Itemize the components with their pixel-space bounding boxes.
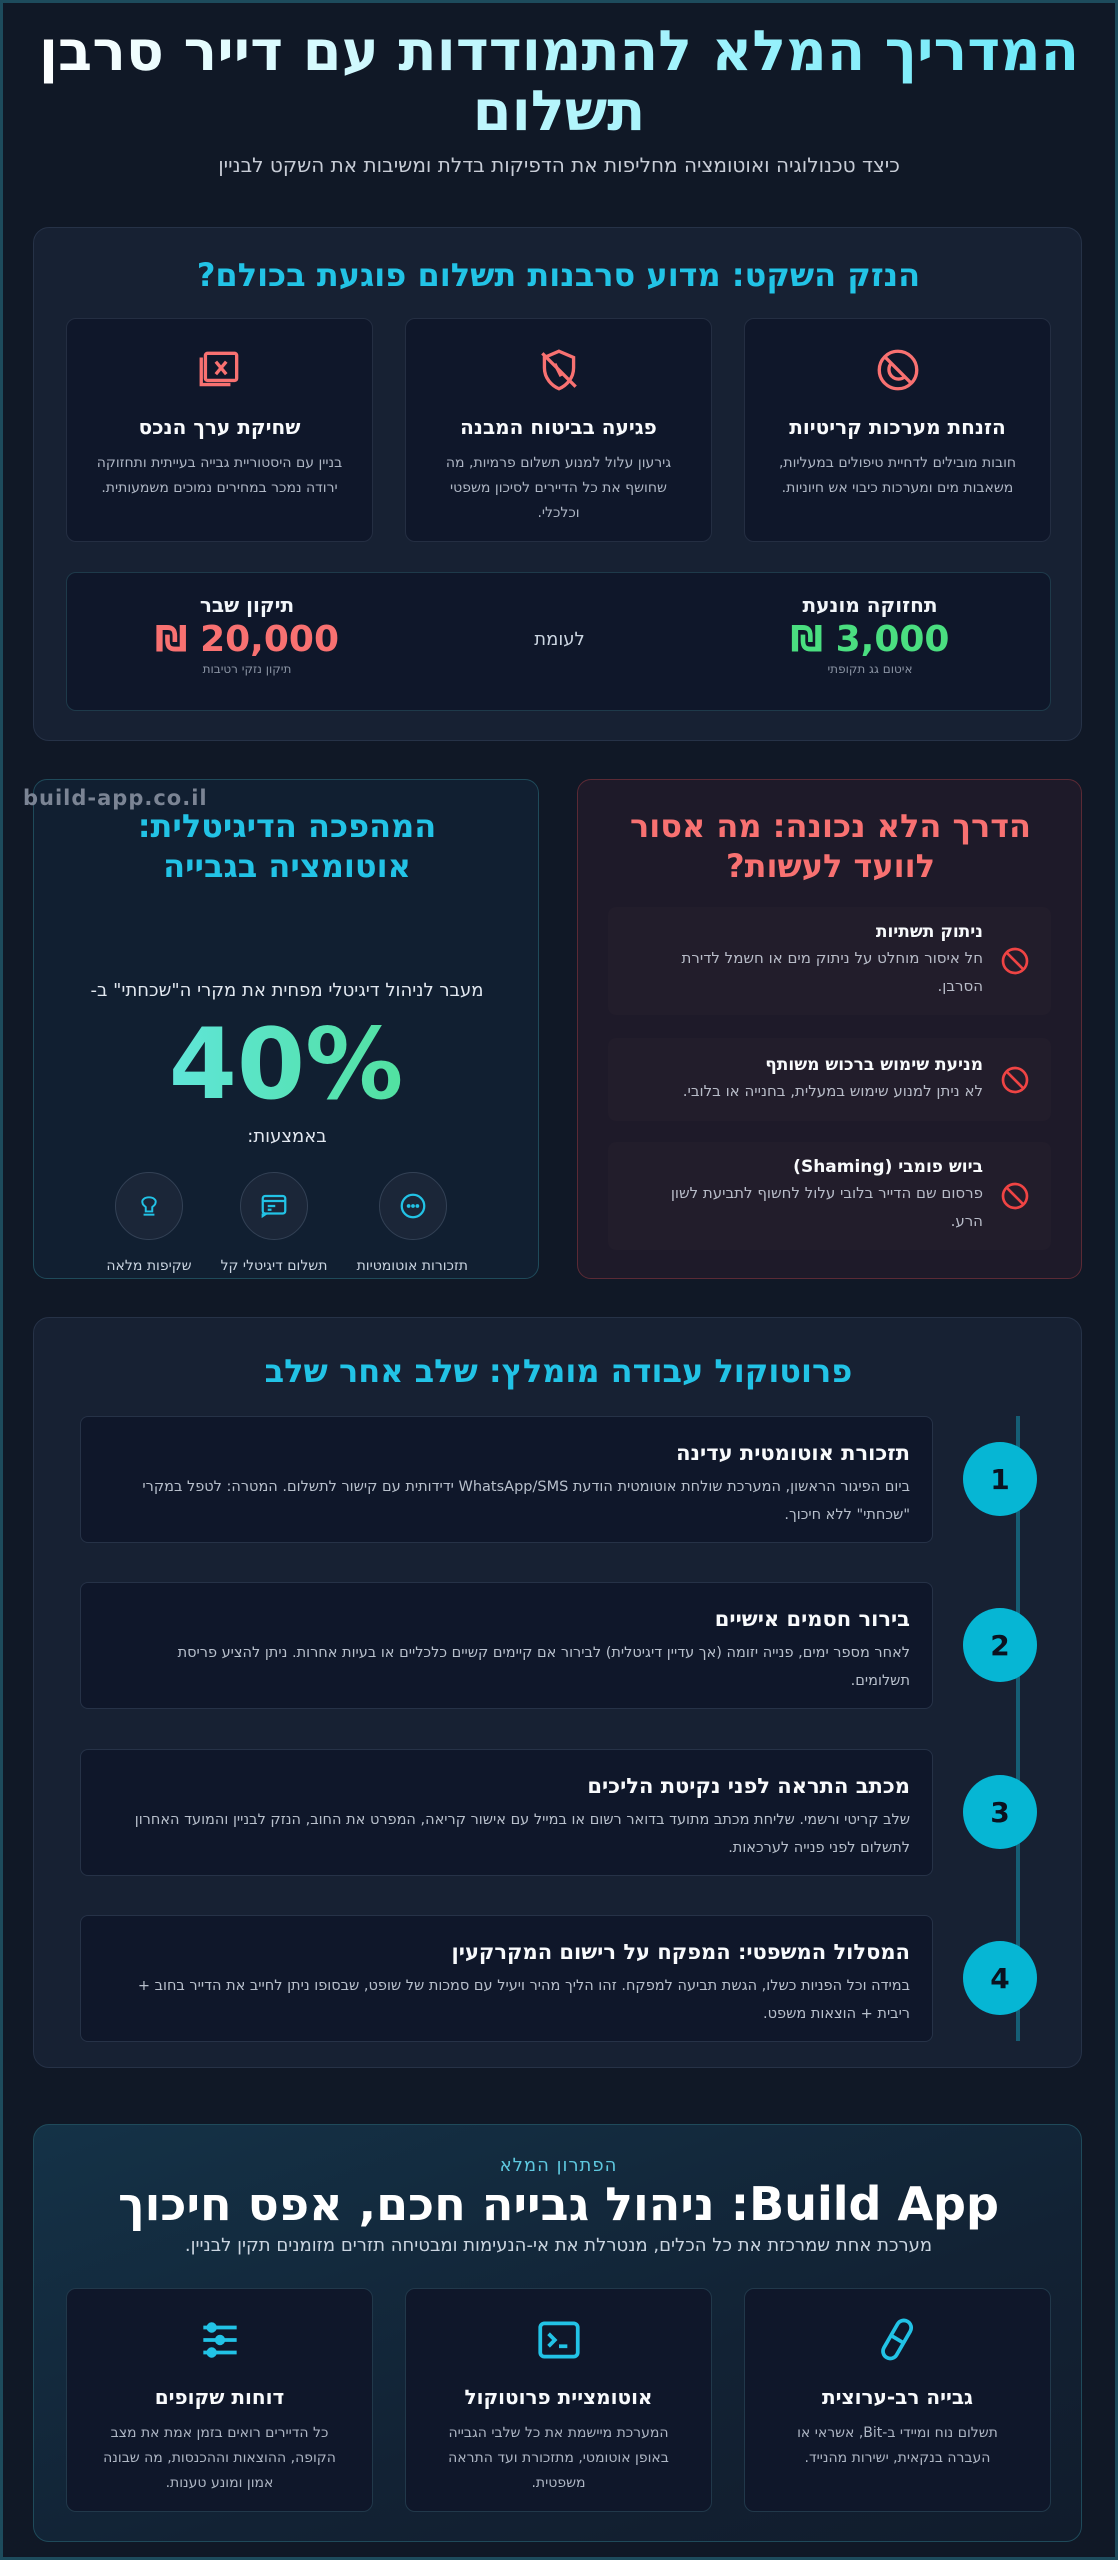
- card: transparent reports: כל הדיירים רואים בזמן אמת את מצב: [111, 2425, 328, 2441]
- icon: ban: [1002, 1182, 1028, 1210]
- preventive cost: [791, 593, 949, 676]
- item: shared property: [608, 1038, 1051, 1121]
- heading: wrong way: לוועד לעשות?: [726, 847, 935, 885]
- step 1: תזכורת אוטומטית עדינה: [676, 1441, 910, 1465]
- icon: reminders: תזכורות אוטומטיות: [357, 1258, 468, 1274]
- panel: solution: [33, 2124, 1082, 2542]
- card: multi-channel: גבייה רב-ערוצית: [822, 2385, 973, 2409]
- panel: silent damage: [33, 227, 1082, 741]
- step 3: שלב קריטי ורשמי. שליחת מכתב מתועד בדואר רשום או במייל עם אישור קריאה, המפרט את החוב, הנזק לבניין והמועד האחרון לתשלום לפני פנייה לערכאות.: [135, 1812, 910, 1856]
- step 4 number: [963, 1941, 1037, 2015]
- item: shaming: ביוש פומבי (Shaming): [793, 1157, 983, 1177]
- step 1: [80, 1416, 933, 1543]
- step 3 number: 3: [990, 1796, 1010, 1828]
- card: protocol automation: באופן אוטומטי, מתזכורת ועד התראה: [448, 2450, 669, 2466]
- step 3: מכתב התראה לפני נקיטת הליכים: [587, 1774, 910, 1798]
- comparison box: [66, 572, 1051, 711]
- item: shaming: פרסום שם הדייר בלובי עלול לחשוף לתביעת לשון: [671, 1184, 983, 1202]
- card: transparent reports: דוחות שקופים: [155, 2385, 284, 2409]
- panel: wrong way: [577, 779, 1082, 1279]
- card: insurance: וכלכלי.: [537, 505, 580, 521]
- card: critical systems: הזנחת מערכות קריטיות: [789, 415, 1006, 439]
- step 4: [80, 1915, 933, 2042]
- heading: digital revolution: המהפכה הדיגיטלית:: [138, 807, 436, 845]
- card: critical systems: חובות מובילים לדחיית טיפולים במעליות,: [779, 455, 1016, 471]
- means icons: [106, 1172, 468, 1274]
- card: protocol automation: משפטית.: [531, 2475, 586, 2491]
- versus: לעומת: [534, 629, 585, 650]
- icon: digital payment: תשלום דיגיטלי קל: [221, 1258, 327, 1274]
- item: shaming: [608, 1142, 1051, 1250]
- heading: protocol: פרוטוקול עבודה מומלץ: שלב אחר שלב: [265, 1352, 852, 1390]
- panel: protocol: [33, 1317, 1082, 2068]
- step 2 number: [963, 1608, 1037, 1682]
- heading: silent damage: הנזק השקט: מדוע סרבנות תשלום פוגעת בכולם?: [197, 256, 920, 294]
- card: critical systems: משאבות מים ומערכות כיבוי אש חיוניות.: [782, 480, 1013, 496]
- card: protocol automation: [405, 2288, 712, 2512]
- repair cost: ₪ 20,000: [155, 619, 339, 660]
- step 2 number: 2: [990, 1628, 1010, 1662]
- icon: transparency: שקיפות מלאה: [106, 1258, 192, 1274]
- repair cost: [155, 593, 339, 676]
- solution title: Build App: ניהול גבייה חכם, אפס חיכוך: [118, 2177, 999, 2231]
- step 3: [80, 1749, 933, 1876]
- icon: sliders: [203, 2322, 237, 2358]
- heading: wrong way: [630, 807, 1031, 885]
- item: utilities: [608, 907, 1051, 1015]
- step 2: בירור חסמים אישיים: [715, 1607, 910, 1631]
- card: protocol automation: המערכת מיישמת את כל שלבי הגבייה: [448, 2425, 668, 2441]
- step 2: תשלומים.: [851, 1673, 910, 1689]
- step 4 number: 4: [990, 1962, 1010, 1994]
- heading: wrong way: הדרך הלא נכונה: מה אסור: [630, 807, 1031, 845]
- card: insurance: פגיעה בביטוח המבנה: [460, 415, 657, 439]
- item: utilities: הסרבן.: [937, 977, 983, 995]
- card: multi-channel: העברה בנקאית, ישירות מהנייד.: [805, 2450, 990, 2466]
- icon: digital payment: [221, 1172, 327, 1274]
- stat text: מעבר לניהול דיגיטלי מפחית את מקרי ה"שכחתי" ב-: [91, 980, 483, 1001]
- item: utilities: ניתוק תשתיות: [876, 922, 983, 942]
- preventive cost: ₪ 3,000: [791, 619, 949, 660]
- item: shared property: מניעת שימוש ברכוש משותף: [765, 1054, 983, 1074]
- means label: באמצעות:: [247, 1126, 327, 1147]
- step 4: במידה וכל הפניות כשלו, הגשת תביעה למפקח. זהו הליך מהיר ויעיל עם סמכות של שופט, שבסופו ניתן לחייב את הדייר בחוב + ריבית + הוצאות משפט.: [138, 1978, 910, 2022]
- heading: digital revolution: אוטומציה בגבייה: [163, 847, 411, 885]
- preventive cost: איטום גג תקופתי: [828, 662, 912, 676]
- icon: ban: [1002, 1066, 1028, 1094]
- item: shared property: לא ניתן למנוע שימוש במעלית, בחנייה או בלובי.: [683, 1082, 983, 1100]
- title: המדריך המלא להתמודדות עם דייר סרבן תשלום: [39, 19, 1079, 144]
- card: multi-channel: [744, 2288, 1051, 2512]
- card: protocol automation: אוטומציית פרוטוקול: [464, 2385, 652, 2409]
- step 2: [80, 1582, 933, 1709]
- repair cost: תיקון שבר: [200, 593, 294, 617]
- card: transparent reports: אמון ומונע טענות.: [166, 2475, 273, 2491]
- preventive cost: תחזוקה מונעת: [802, 593, 938, 617]
- repair cost: תיקון נזקי רטיבות: [203, 662, 291, 676]
- icon: pill: [881, 2318, 914, 2360]
- step 3 number: [963, 1775, 1037, 1849]
- card: insurance: גירעון עלול למנוע תשלום פרמיות, מה: [446, 455, 671, 471]
- card: insurance: [405, 318, 712, 542]
- card: transparent reports: הקופה, ההוצאות וההכנסות, מה שבונה: [103, 2450, 336, 2466]
- card: multi-channel: תשלום נוח ומיידי ב-Bit, אשראי או: [797, 2425, 998, 2441]
- step 1 number: 1: [990, 1462, 1010, 1496]
- item: utilities: חל איסור מוחלט על ניתוק מים או חשמל לדירת: [682, 949, 983, 967]
- big stat 40%: [34, 1010, 538, 1120]
- card: asset value: [66, 318, 373, 542]
- icon: broken frame: [200, 352, 238, 386]
- panel: digital revolution: [33, 779, 539, 1279]
- card: transparent reports: [66, 2288, 373, 2512]
- card: asset value: בניין עם היסטוריית גבייה בעייתית ותחזוקה: [97, 455, 342, 471]
- icon: shield off: [541, 349, 577, 391]
- big stat 40%: 40%: [169, 1008, 403, 1122]
- icon: reminders: [356, 1172, 468, 1274]
- card: asset value: ירודה נמכר במחירים נמוכים משמעותית.: [101, 480, 338, 496]
- icon: terminal: [538, 2322, 580, 2358]
- item: shaming: הרע.: [951, 1212, 983, 1230]
- solution subtitle: מערכת אחת שמרכזת את כל הכלים, מנטרלת את אי-הנעימות ומבטיחה תזרים מזומנים תקין לבניין.: [185, 2235, 932, 2256]
- heading: digital revolution: [138, 807, 436, 885]
- icon: transparency: [106, 1172, 192, 1274]
- card: critical systems: [744, 318, 1051, 542]
- eyebrow: הפתרון המלא: [500, 2155, 617, 2176]
- step 2: לאחר מספר ימים, פנייה יזומה (אך עדיין דיגיטלית) לבירור אם קיימים קשיים כלכליים או בעיות אחרות. ניתן להציע פריסת: [178, 1645, 910, 1661]
- subtitle: כיצד טכנולוגיה ואוטומציה מחליפות את הדפיקות בדלת ומשיבות את השקט לבניין: [218, 153, 900, 177]
- step 1: ביום הפיגור הראשון, המערכת שולחת אוטומטית הודעת WhatsApp/SMS ידידותית עם קישור לתשלום. המטרה: לטפל במקרי "שכחתי" ללא חיכוך.: [142, 1479, 910, 1523]
- icon: ban: [1002, 948, 1028, 974]
- card: insurance: שחושף את כל הדיירים לסיכון משפטי: [450, 480, 667, 496]
- step 1 number: [963, 1442, 1037, 1516]
- timeline line: [1016, 1416, 1020, 2041]
- step 4: המסלול המשפטי: המפקח על רישום המקרקעין: [452, 1940, 910, 1964]
- icon: banned: [878, 350, 918, 390]
- card: asset value: שחיקת ערך הנכס: [139, 415, 300, 439]
- watermark: build-app.co.il: [23, 786, 208, 810]
